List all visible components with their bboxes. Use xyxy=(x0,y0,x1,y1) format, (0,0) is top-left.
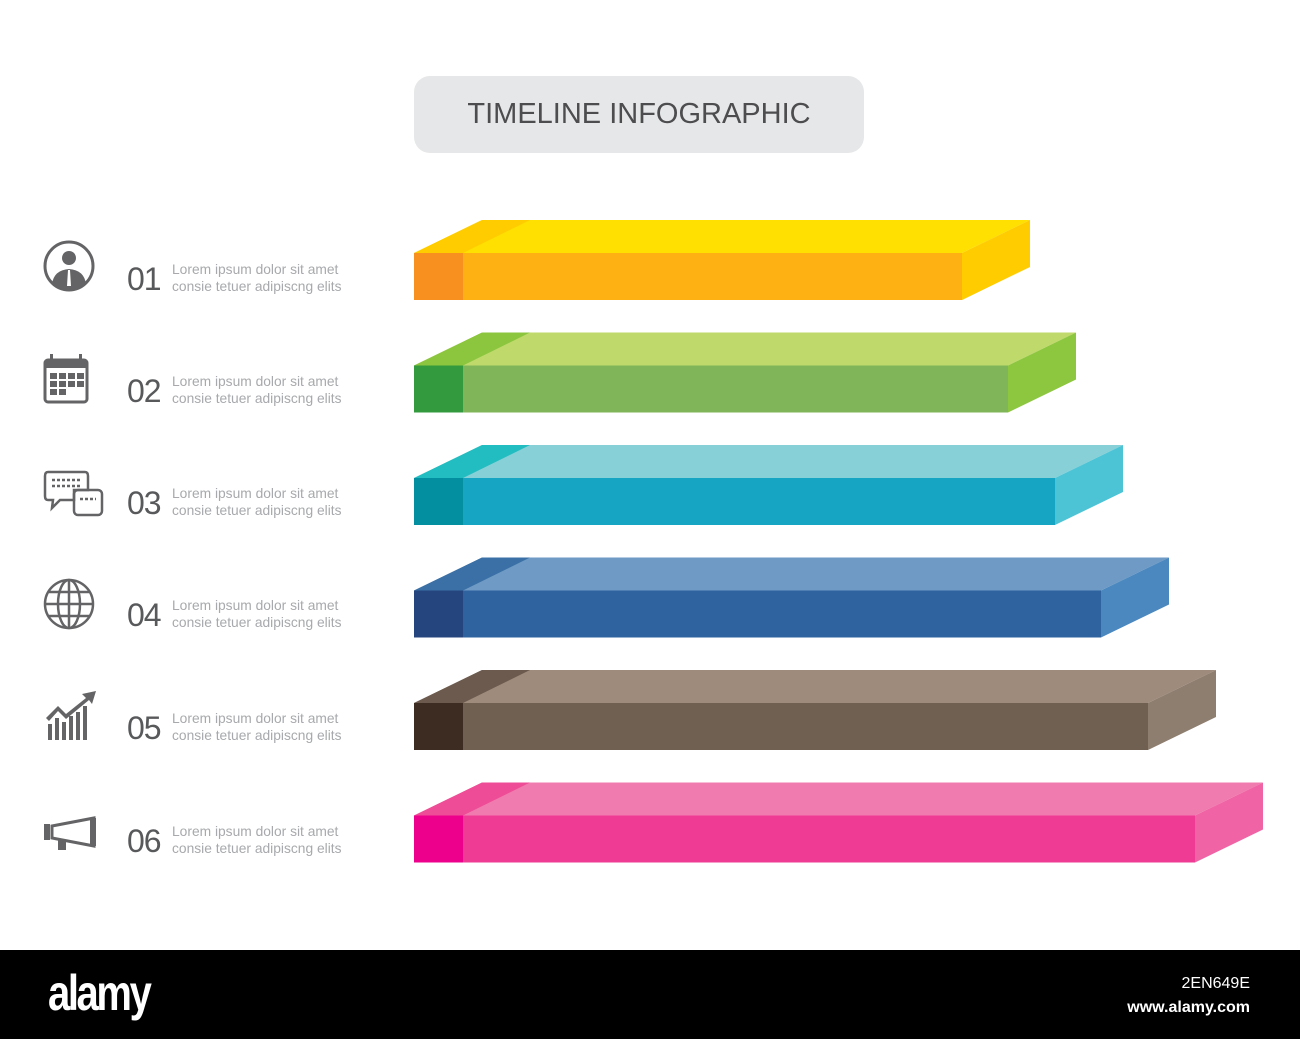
item 04: 04 xyxy=(127,597,161,633)
image id: 2EN649E xyxy=(1182,975,1250,992)
footer xyxy=(0,950,1300,1039)
icons xyxy=(44,240,104,850)
bar 5 xyxy=(414,670,1216,750)
icon: chart xyxy=(46,691,96,740)
bar 6 xyxy=(414,782,1263,862)
item 01 xyxy=(127,261,342,297)
item 02: Lorem ipsum dolor sit amet xyxy=(172,374,338,389)
item 02: 02 xyxy=(127,373,161,409)
bar 2 xyxy=(414,332,1076,412)
bar 3 xyxy=(414,445,1123,525)
title: TIMELINE INFOGRAPHIC xyxy=(467,98,811,130)
item 04: consie tetuer adipiscng elits xyxy=(172,615,342,630)
image id: www.alamy.com xyxy=(1127,999,1250,1016)
item 03: Lorem ipsum dolor sit amet xyxy=(172,486,338,501)
item 06: 06 xyxy=(127,823,161,859)
bar 1 xyxy=(414,220,1030,300)
icon: calendar xyxy=(45,354,87,402)
item 06: consie tetuer adipiscng elits xyxy=(172,841,342,856)
item 03: consie tetuer adipiscng elits xyxy=(172,503,342,518)
item 02: consie tetuer adipiscng elits xyxy=(172,391,342,406)
icon: person xyxy=(45,242,93,290)
title xyxy=(414,76,864,153)
item 05: Lorem ipsum dolor sit amet xyxy=(172,711,338,726)
item 05: consie tetuer adipiscng elits xyxy=(172,728,342,743)
item 02 xyxy=(127,373,342,409)
item 03: 03 xyxy=(127,485,161,521)
item 05: 05 xyxy=(127,710,161,746)
item 01: consie tetuer adipiscng elits xyxy=(172,279,342,294)
item 06: Lorem ipsum dolor sit amet xyxy=(172,824,338,839)
icon: chat xyxy=(45,472,102,515)
icon: globe xyxy=(45,580,93,628)
item 04: Lorem ipsum dolor sit amet xyxy=(172,598,338,613)
item 03 xyxy=(127,485,342,521)
icon: megaphone xyxy=(44,818,96,850)
logo: alamy xyxy=(48,965,149,1021)
item 01: 01 xyxy=(127,261,161,297)
image id xyxy=(1127,975,1250,1016)
item 05 xyxy=(127,710,342,746)
item 06 xyxy=(127,823,342,859)
item 04 xyxy=(127,597,342,633)
bar 4 xyxy=(414,558,1169,638)
item 01: Lorem ipsum dolor sit amet xyxy=(172,262,338,277)
